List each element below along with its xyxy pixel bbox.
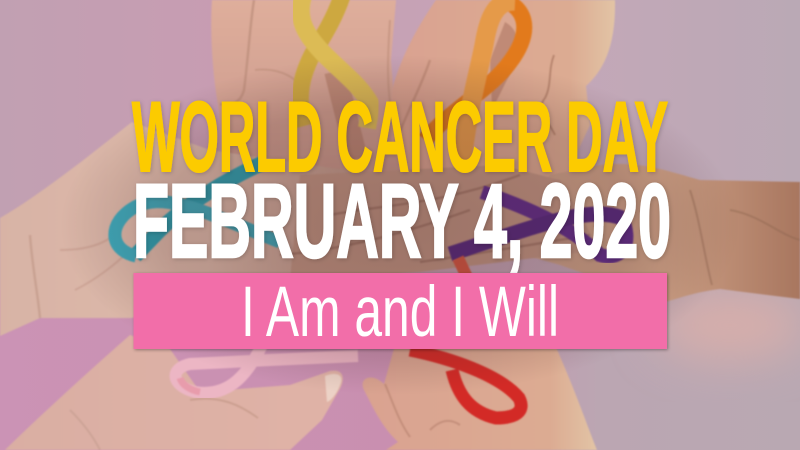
hand: top right holding orange ribbon <box>392 0 615 195</box>
hand: bottom left holding pink ribbon <box>5 335 343 450</box>
ribbon: purple <box>450 192 626 256</box>
banner text: I Am and I Will: I Am and I Will <box>241 273 559 352</box>
darkening behind the title <box>60 55 740 395</box>
hand: right arm <box>490 164 800 302</box>
ribbon: teal <box>115 162 280 256</box>
pink banner <box>134 273 667 349</box>
ribbon: orange <box>425 1 524 160</box>
hand: left hand <box>0 122 410 336</box>
ribbon: pink <box>176 345 358 393</box>
ribbon: yellow <box>300 0 371 128</box>
ribbon: red <box>410 258 521 418</box>
hand: bottom right holding red ribbon <box>363 345 597 450</box>
hand: top left holding yellow ribbon <box>211 0 400 180</box>
fingers meeting at the centre <box>280 165 600 280</box>
